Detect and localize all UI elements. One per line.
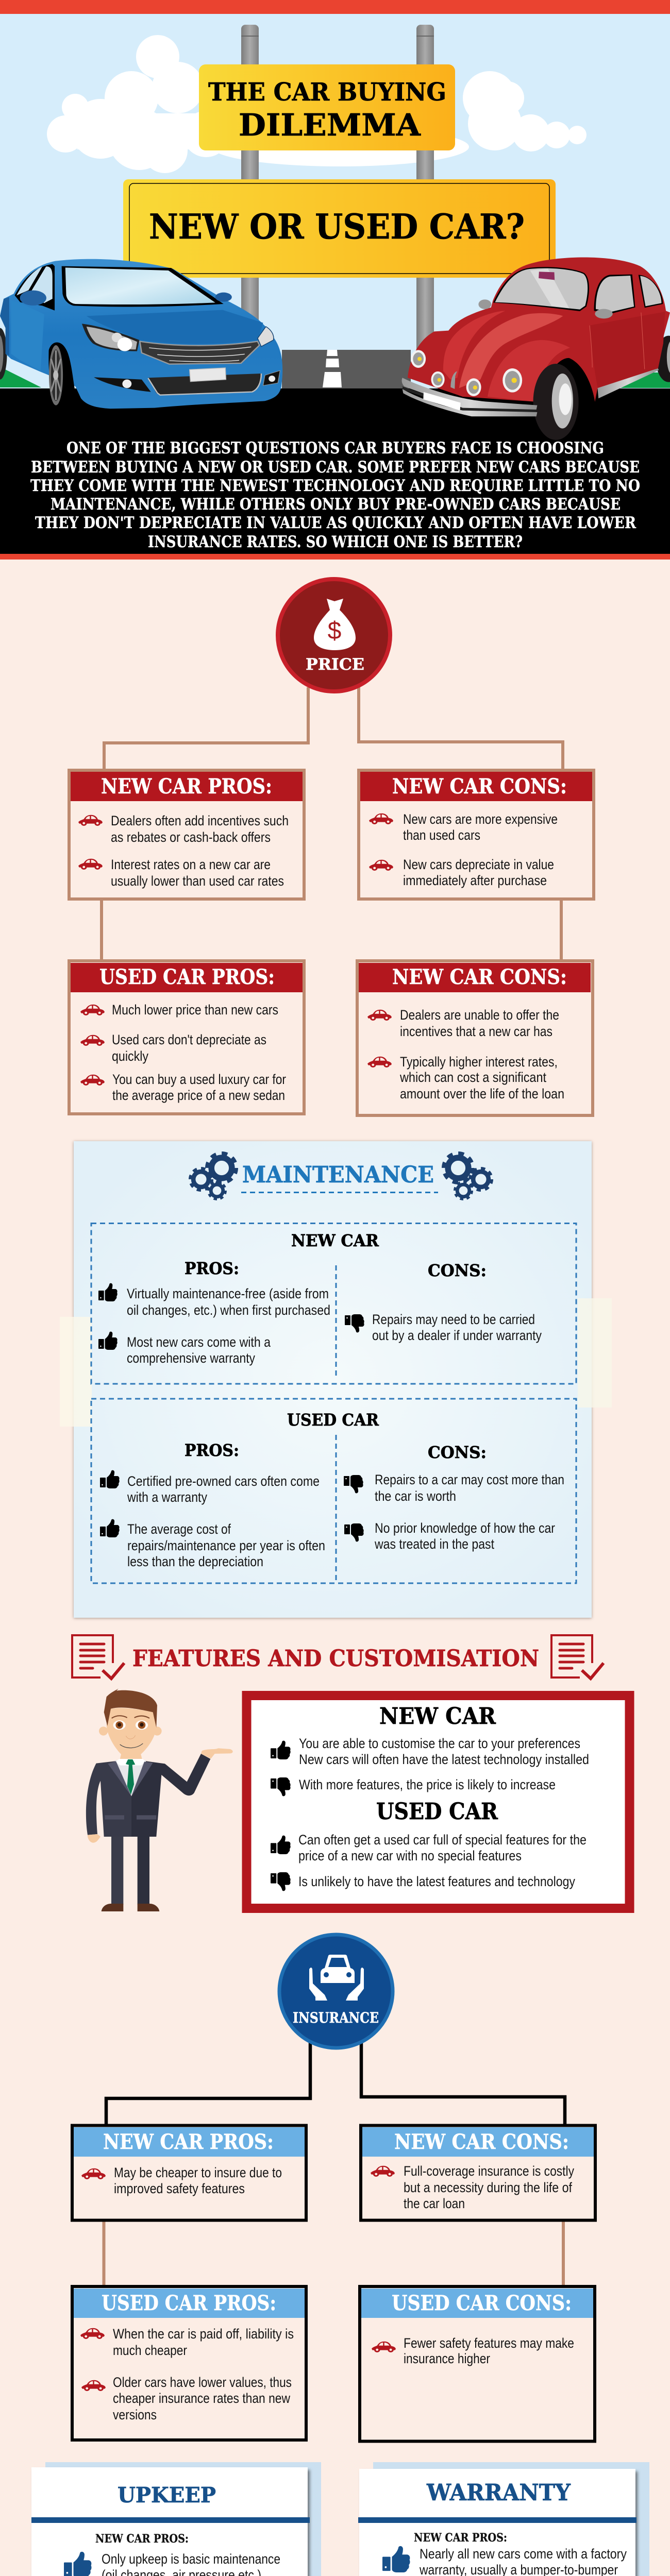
bullet text: incentives that a new car has [400,1024,552,1039]
bullet text [127,1334,271,1366]
bullet text: Fewer safety features may make [404,2335,574,2351]
icon: car in hands [309,1955,364,2001]
sign: the car buying dilemma [199,64,455,150]
bullet text: oil changes, etc.) when first purchased [127,1302,330,1318]
box heading: NEW CAR PROS: [103,2130,274,2154]
bullet text: insurance higher [404,2351,490,2366]
subheading: NEW CAR [291,1231,379,1250]
bullet text: With more features, the price is likely to increase [299,1777,556,1792]
icon: car [80,2328,105,2339]
panel: insurance section [72,1935,595,2441]
bullet text: Is unlikely to have the latest features and technology [298,1874,575,1889]
bullet text [127,1521,325,1569]
bullet text [298,1832,587,1863]
box heading: USED CAR PROS: [102,2291,276,2315]
heading: upkeep: UPKEEP [118,2483,216,2507]
box: new car cons second [357,961,593,1115]
bullet text: out by a dealer if under warranty [372,1328,542,1343]
bullet text: quickly [112,1048,148,1064]
box: new car pros [69,770,304,899]
bullet text [399,1054,564,1101]
subheading pros: PROS: [185,1259,239,1278]
bullet text: Used cars don't depreciate as [112,1032,266,1047]
icon: money bag [314,599,356,650]
icon: car [78,859,103,870]
box heading: USED CAR PROS: [99,965,275,989]
box: new car pros [72,2126,306,2221]
icon: thumb down [344,1523,364,1541]
bullet text: Dealers often add incentives such [111,813,289,828]
icon: car [372,2342,396,2352]
box: used car pros [69,961,304,1114]
bullet text: with a warranty [127,1489,207,1505]
bullet text [127,1286,330,1318]
bullet text: New cars are more expensive [403,811,558,827]
heading: FEATURES AND CUSTOMISATION [132,1646,539,1672]
bullet text: Nearly all new cars come with a factory [420,2546,627,2562]
icon: thumb down [345,1314,364,1332]
sign posts [241,25,434,375]
bullet text [127,1473,320,1505]
bullet text: which can cost a significant [399,1070,546,1085]
icon: car [78,815,103,826]
bullet text: Most new cars come with a [127,1334,271,1350]
icon: thumb up [271,1836,291,1854]
question: NEW OR USED CAR? [149,207,525,247]
bullet text: Certified pre-owned cars often come [127,1473,320,1489]
box: maintenance new car [91,1223,576,1384]
intro text: INSURANCE RATES. SO WHICH ONE IS BETTER? [148,533,523,551]
panel: maintenance [60,1141,612,1618]
bullet text [113,2326,294,2358]
bullet text: price of a new car with no special features [298,1848,522,1863]
bullet text: the average price of a new sedan [112,1088,285,1103]
bullet text: Much lower price than new cars [112,1002,278,1018]
bullet text [299,1736,589,1767]
bullet text [403,857,554,888]
icon: thumb up [271,1741,291,1759]
bullet text: usually lower than used car rates [111,873,284,889]
illustration: blue car [0,259,282,413]
bullet text: repairs/maintenance per year is often [127,1538,325,1553]
box heading: NEW CAR PROS: [101,774,272,799]
box: used car cons [360,2286,595,2441]
bullet text: than used cars [403,827,480,843]
icon: car [80,1075,105,1086]
bullet text: comprehensive warranty [127,1350,255,1366]
heading: warranty: WARRANTY [426,2480,571,2506]
icon: thumb up [382,2546,410,2572]
bullet text: Typically higher interest rates, [400,1054,558,1070]
icon: thumb up [98,1283,118,1301]
box: new car cons [361,2126,595,2221]
box: used car pros [72,2286,306,2440]
bullet text: improved safety features [114,2181,245,2196]
icon: thumb down [271,1872,291,1891]
bullet text: Dealers are unable to offer the [400,1007,559,1023]
panel: header hero [0,0,670,560]
icon: checklist left [72,1635,124,1679]
dollar sign: $ [328,617,341,645]
icon: car [80,1005,105,1015]
bullet text [404,2335,574,2366]
icon: thumb up [98,1332,118,1350]
subheading: NEW CAR PROS: [414,2531,507,2545]
road [0,350,670,560]
subheading cons: CONS: [428,1443,487,1462]
bullet text: Repairs to a car may cost more than [375,1472,564,1487]
bullet text [111,813,289,845]
icon: car [369,814,393,824]
bullet text: versions [113,2407,157,2422]
bullet text: as rebates or cash-back offers [111,829,271,845]
connector lines [102,687,563,959]
bullet text: New cars depreciate in value [403,857,554,872]
bullet text: Virtually maintenance-free (aside from [127,1286,329,1301]
icon: thumb up [100,1519,120,1537]
bullet text: May be cheaper to insure due to [114,2165,282,2180]
subheading pros: PROS: [185,1440,239,1460]
badge label: PRICE [306,655,364,674]
panel: warranty [358,2462,649,2576]
bullet text: Can often get a used car full of special features for the [298,1832,587,1848]
subheading cons: CONS: [428,1261,487,1280]
box heading: NEW CAR CONS: [392,965,567,989]
box: maintenance used car [91,1399,576,1583]
icon: car [80,1035,105,1046]
bullet text: cheaper insurance rates than new [113,2391,290,2406]
bullet text: the car is worth [375,1488,456,1504]
bullet text: Interest rates on a new car are [111,857,271,872]
panel: upkeep [31,2462,321,2576]
illustration: businessman [86,1688,233,1911]
panel: price section [69,579,594,1115]
subheading: USED CAR [287,1410,379,1430]
bullet text [404,2163,574,2211]
heading word: DILEMMA [239,107,421,143]
bullet text [403,811,558,843]
heading: maintenance: MAINTENANCE [242,1162,434,1188]
bullet text: Repairs may need to be carried [372,1312,535,1327]
subheading new car: NEW CAR [379,1703,496,1730]
icon: thumb down [344,1475,363,1493]
bullet text: When the car is paid off, liability is [113,2326,294,2342]
box heading: NEW CAR CONS: [394,2130,569,2154]
badge label: INSURANCE [293,2009,379,2026]
icon: car [81,2380,106,2391]
bullet text: New cars will often have the latest technology installed [299,1752,589,1767]
bullet text [111,857,284,889]
bullet text: less than the depreciation [127,1554,263,1569]
bullet text: Full-coverage insurance is costly [404,2163,574,2179]
bullet text: Older cars have lower values, thus [113,2375,292,2390]
box heading: USED CAR CONS: [392,2291,572,2315]
sign: new or used car [123,179,556,278]
bullet text: was treated in the past [374,1536,494,1552]
bullet text: the car loan [404,2196,465,2211]
heading line: THE CAR BUYING [208,78,446,107]
bullet text [114,2165,282,2196]
icon: thumb down [271,1777,291,1796]
icon: car [371,2166,395,2177]
box: new car cons [359,770,594,899]
bullet text [374,1520,555,1552]
intro text [30,439,640,551]
bullet text [419,2546,627,2576]
bullet text [112,1072,286,1103]
bullet text [113,2375,292,2422]
icon: gears left [190,1154,236,1199]
badge: insurance [279,1935,393,2048]
box: features card [246,1696,630,1908]
icon: car [369,860,393,871]
icon: car [367,1057,392,1067]
bullet text: Only upkeep is basic maintenance [102,2551,280,2567]
icon: car [367,1010,392,1021]
icon: thumb up [64,2552,92,2576]
connector lines [104,2040,565,2285]
bullet text [400,1007,559,1039]
badge: price [278,579,390,691]
bullet text: amount over the life of the loan [400,1086,564,1101]
bullet text: You can buy a used luxury car for [112,1072,286,1087]
bullet text [372,1312,542,1343]
icon: checklist right [551,1635,604,1679]
icon: car [81,2168,106,2179]
panel: features and customisation [72,1635,630,1911]
bullet text [112,1032,266,1064]
subheading used car: USED CAR [376,1799,498,1825]
bullet text: much cheaper [113,2343,187,2358]
bullet text: No prior knowledge of how the car [375,1520,555,1536]
bullet text [102,2551,280,2576]
bullet text: You are able to customise the car to your preferences [299,1736,580,1751]
subheading: NEW CAR PROS: [95,2532,189,2546]
bullet text: The average cost of [127,1521,231,1537]
bullet text: but a necessity during the life of [404,2180,572,2195]
icon: thumb up [100,1470,120,1488]
illustration: red car [402,258,670,442]
icon: gears right [444,1154,492,1199]
bullet text [375,1472,564,1504]
box heading: NEW CAR CONS: [392,774,567,799]
clouds [47,35,587,173]
bullet text: immediately after purchase [403,873,547,888]
